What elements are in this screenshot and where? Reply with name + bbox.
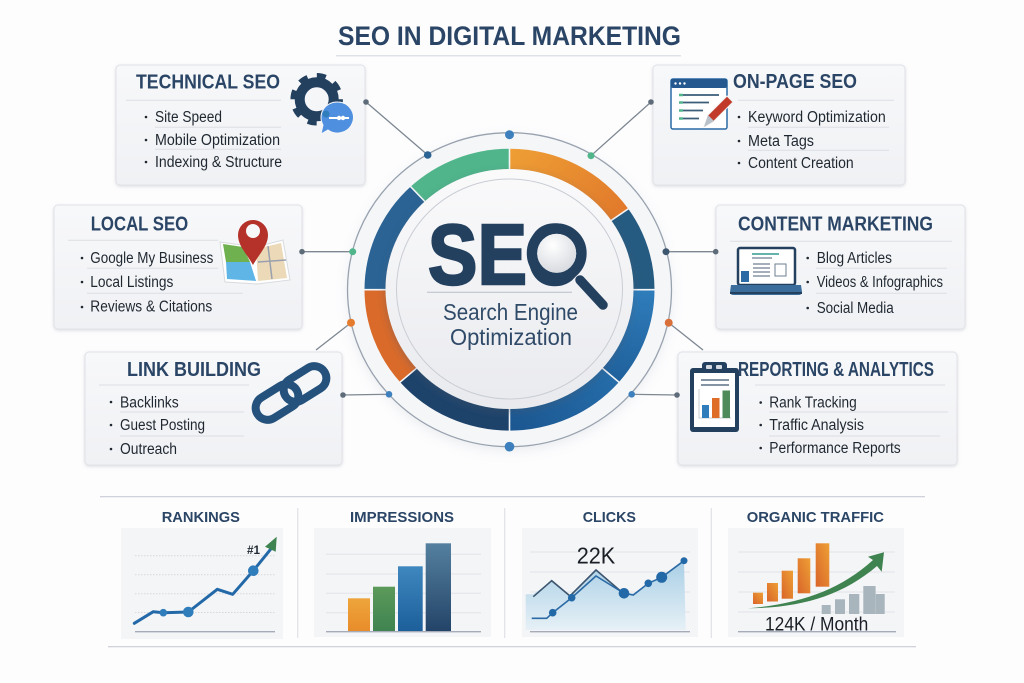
chart: clicks <box>522 509 698 637</box>
center disc <box>386 169 634 409</box>
ring nodes <box>347 130 673 452</box>
central SEO wheel: Optimization <box>450 324 572 350</box>
list: technical SEO <box>145 109 282 171</box>
list: link building <box>110 395 205 458</box>
chart: rankings: RANKINGS <box>162 509 240 526</box>
list: local SEO: Google My Business <box>90 250 214 267</box>
chart: organic traffic: 124K / Month <box>765 615 868 636</box>
heading: content marketing: CONTENT MARKETING <box>738 214 933 236</box>
chart: organic traffic: ORGANIC TRAFFIC <box>747 509 884 526</box>
list: on-page SEO: Keyword Optimization <box>748 109 886 126</box>
chart: rankings: #1 <box>247 545 261 557</box>
chart: clicks: CLICKS <box>583 509 636 526</box>
list: link building: Outreach <box>120 441 177 458</box>
KPI strip <box>100 497 925 647</box>
panel: reporting and analytics <box>678 352 957 465</box>
SEO wordmark: SEO <box>428 207 584 302</box>
chart: rankings <box>121 509 283 639</box>
list: link building: Backlinks <box>120 395 179 412</box>
chart: clicks: 22K <box>577 542 616 568</box>
subtitle: Search Engine <box>443 299 578 325</box>
heading: local SEO: LOCAL SEO <box>91 214 188 236</box>
heading: link building: LINK BUILDING <box>127 359 261 381</box>
list: on-page SEO <box>738 109 886 172</box>
list: content marketing: Videos & Infographics <box>817 274 943 291</box>
icon: clipboard report <box>690 362 739 432</box>
connector lines <box>302 102 716 395</box>
heading: reporting and analytics: REPORTING & ANALYTICS <box>738 359 934 381</box>
panel: link building <box>85 352 342 465</box>
icon: document window with pencil <box>671 79 733 129</box>
list: content marketing <box>806 250 943 317</box>
panel: technical SEO <box>116 65 365 185</box>
heading: technical SEO: TECHNICAL SEO <box>136 71 280 93</box>
connector end dots <box>299 99 718 398</box>
list: technical SEO: Site Speed <box>155 109 222 126</box>
icon: map with pin <box>220 220 290 284</box>
list: content marketing: Blog Articles <box>817 250 892 267</box>
heading: on-page SEO: ON-PAGE SEO <box>733 71 857 93</box>
panel: content marketing <box>716 205 965 329</box>
list: local SEO: Local Listings <box>90 274 174 291</box>
icon: chain links <box>251 362 331 424</box>
list: technical SEO: Indexing & Structure <box>155 154 282 171</box>
ring segments <box>364 148 656 432</box>
list: on-page SEO: Meta Tags <box>748 133 814 150</box>
list: local SEO <box>81 250 214 316</box>
chart: impressions: IMPRESSIONS <box>350 509 454 526</box>
list: local SEO: Reviews & Citations <box>90 299 213 316</box>
title: SEO IN DIGITAL MARKETING <box>338 21 681 51</box>
panel: on-page SEO <box>653 65 905 185</box>
list: reporting and analytics <box>759 395 901 457</box>
list: content marketing: Social Media <box>817 300 894 317</box>
list: reporting and analytics: Rank Tracking <box>769 395 857 412</box>
central SEO wheel <box>347 130 673 452</box>
icon: laptop <box>730 248 802 295</box>
list: reporting and analytics: Performance Reports <box>769 440 901 457</box>
list: link building: Guest Posting <box>120 417 205 434</box>
magnifier <box>532 229 603 305</box>
list: technical SEO: Mobile Optimization <box>155 132 280 149</box>
chart: organic traffic <box>728 509 904 637</box>
list: on-page SEO: Content Creation <box>748 155 854 172</box>
icon: gear with chat bubble <box>293 76 353 134</box>
list: reporting and analytics: Traffic Analysis <box>769 417 864 434</box>
chart: impressions <box>314 509 491 637</box>
panel: local SEO <box>54 205 302 329</box>
